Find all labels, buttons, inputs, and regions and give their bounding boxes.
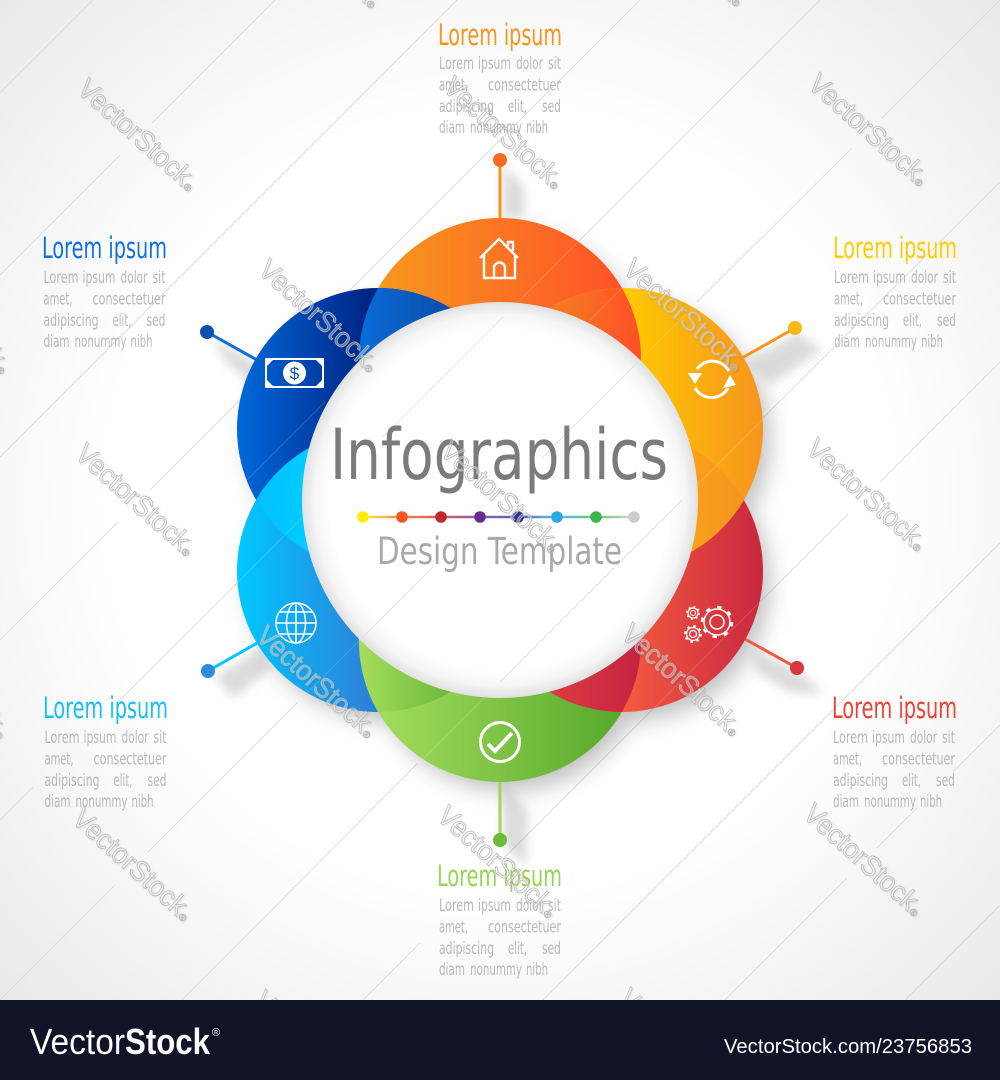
- text block: bottom: diam: [439, 960, 465, 979]
- line: green: [498, 780, 502, 840]
- line: top: [498, 160, 502, 220]
- text block: upper left: [42, 231, 167, 351]
- text block: upper left: elit,: [112, 311, 132, 330]
- text block: upper left: Lorem: [44, 268, 78, 287]
- text block: upper right: diam: [834, 332, 860, 351]
- text block: lower right: nibh: [920, 792, 942, 811]
- text block: top: sit: [548, 54, 561, 73]
- text block: lower left: ipsum: [84, 728, 116, 747]
- text block: bottom: ipsum: [478, 896, 511, 915]
- text block: bottom: Lorem ipsum: [437, 859, 562, 893]
- text block: lower left: sed: [148, 771, 166, 790]
- text block: upper right: nonummy: [865, 332, 917, 351]
- text block: upper right: elit,: [903, 311, 922, 330]
- text block: upper right: ipsum: [873, 268, 906, 287]
- dot: red: [790, 661, 804, 675]
- text block: bottom: [437, 859, 562, 979]
- overlap: orange over yellow: [550, 288, 641, 361]
- watermarks: VectorStock: [432, 800, 559, 919]
- watermarks: VectorStock: [801, 433, 928, 552]
- text block: lower left: consectetuer: [94, 750, 167, 768]
- watermarks: VectorStock: [803, 68, 930, 187]
- text block: upper right: amet,: [834, 290, 863, 308]
- text block: lower right: adipiscing: [833, 771, 888, 790]
- text block: top: [438, 18, 562, 137]
- text block: top: sed: [542, 97, 561, 116]
- text block: upper left: dolor: [120, 268, 148, 287]
- text block: bottom: amet,: [439, 918, 468, 936]
- text block: bottom: dolor: [516, 896, 543, 915]
- text block: lower right: sed: [936, 771, 955, 790]
- text block: bottom: Lorem: [439, 896, 474, 915]
- text block: upper left: consectetuer: [92, 290, 166, 308]
- text block: top: Lorem: [439, 54, 474, 73]
- watermarks: ®: [176, 912, 189, 925]
- text block: upper right: adipiscing: [834, 311, 889, 330]
- text block: lower right: Lorem: [833, 728, 868, 747]
- text block: top: elit,: [508, 97, 527, 116]
- text block: lower right: elit,: [902, 771, 921, 790]
- petal ring: [237, 218, 763, 782]
- connector shadows: [212, 165, 824, 866]
- watermarks: ®: [541, 909, 554, 922]
- text block: upper left: nibh: [130, 332, 152, 351]
- colored dot divider: [357, 511, 640, 523]
- watermarks: VectorStock: [618, 253, 745, 372]
- text block: top: amet,: [439, 76, 468, 94]
- icon: gears: [685, 607, 732, 642]
- icon: globe: [276, 603, 316, 643]
- text block: lower right: amet,: [833, 750, 862, 768]
- watermarks: Vec: [249, 985, 299, 1034]
- text block: lower right: ipsum: [872, 728, 905, 747]
- text block: lower left: elit,: [114, 771, 132, 790]
- watermarks: VectorStock: [435, 435, 562, 554]
- text block: bottom: elit,: [508, 939, 527, 958]
- watermarks: ®: [912, 177, 925, 190]
- text block: upper right: [833, 231, 957, 351]
- text block: top: Lorem ipsum: [438, 18, 562, 52]
- text block: lower left: diam: [44, 792, 70, 811]
- watermarks: VectorStock: [798, 798, 925, 917]
- watermarks: ®: [910, 542, 923, 555]
- dot: yellow: [788, 321, 802, 335]
- dot: cyan: [201, 664, 215, 678]
- text block: lower right: sit: [942, 728, 955, 747]
- text block: upper left: sed: [146, 311, 166, 330]
- watermarks: VectorStock: [438, 71, 565, 190]
- line: yellow: [742, 328, 795, 358]
- petal: yellow: [481, 288, 763, 570]
- text block: top: diam: [439, 118, 465, 137]
- icon: banknote: $: [290, 364, 300, 383]
- text block: upper right: consectetuer: [883, 290, 956, 308]
- text block: upper left: Lorem ipsum: [42, 231, 167, 265]
- text block: upper left: amet,: [44, 290, 73, 308]
- text block: lower left: nonummy: [76, 792, 128, 811]
- text block: upper right: nibh: [921, 332, 943, 351]
- watermarks: VectorStock: [72, 73, 199, 192]
- watermarks: VectorStock: [616, 618, 743, 737]
- central white disc: [302, 302, 698, 698]
- overlap: light blue over blue: [256, 448, 309, 552]
- text block: upper left: nonummy: [74, 332, 127, 351]
- text block: top: adipiscing: [439, 97, 494, 116]
- text block: lower left: adipiscing: [44, 771, 100, 790]
- text block: lower left: amet,: [44, 750, 74, 768]
- text block: top: nonummy: [470, 118, 522, 137]
- footer bar: [0, 1000, 1000, 1080]
- watermarks: ®: [181, 182, 194, 195]
- text block: bottom: sit: [548, 896, 561, 915]
- text block: upper left: ipsum: [82, 268, 116, 287]
- watermarks: ®: [727, 362, 740, 375]
- watermarks: ®: [725, 727, 738, 740]
- icon: refresh arrows: [688, 361, 736, 398]
- text block: bottom: consectetuer: [488, 918, 561, 936]
- text block: lower left: sit: [154, 728, 167, 747]
- text block: upper left: adipiscing: [44, 311, 98, 330]
- watermarks: VectorStock: [70, 438, 197, 557]
- overlap: blue over orange: [359, 288, 451, 361]
- text block: upper right: sed: [937, 311, 956, 330]
- text block: top: nibh: [526, 118, 548, 137]
- watermarks: Vec: [614, 983, 664, 1032]
- text block: lower right: nonummy: [864, 792, 916, 811]
- overlap: yellow over red: [691, 448, 744, 552]
- title: Infographics: Infographics: [330, 414, 668, 496]
- text block: lower left: [43, 691, 168, 811]
- dot: blue: [200, 325, 214, 339]
- text block: bottom: adipiscing: [439, 939, 494, 958]
- petal: green: [359, 500, 641, 782]
- text block: upper right: Lorem: [834, 268, 869, 287]
- petal: light blue: [237, 430, 519, 712]
- connector dots: [200, 153, 804, 847]
- text block: upper left: diam: [44, 332, 70, 351]
- text block: upper right: dolor: [911, 268, 938, 287]
- dot: green: [493, 833, 507, 847]
- footer image id: VectorStock.com/23756853: [724, 1035, 972, 1058]
- text block: upper left: sit: [152, 268, 166, 287]
- watermarks: ®: [360, 729, 373, 742]
- text block: lower left: nibh: [132, 792, 154, 811]
- petal: orange: [359, 218, 641, 500]
- subtitle: Design Template: Design Template: [377, 530, 622, 573]
- watermarks: ®: [362, 363, 375, 376]
- text block: lower right: diam: [833, 792, 859, 811]
- text block: lower right: consectetuer: [882, 750, 955, 768]
- text block: lower left: dolor: [122, 728, 149, 747]
- text block: lower left: Lorem ipsum: [43, 691, 168, 725]
- text block: lower right: [832, 691, 957, 811]
- line: blue: [207, 332, 257, 360]
- dot: top: [493, 153, 507, 167]
- watermarks: VectorStock: [253, 254, 380, 373]
- petal: blue: [237, 288, 519, 570]
- text block: lower right: dolor: [910, 728, 937, 747]
- watermarks: ®: [179, 547, 192, 560]
- text block: bottom: nibh: [526, 960, 548, 979]
- icon: banknote: [266, 359, 323, 387]
- line: cyan: [208, 642, 259, 671]
- connector lines: [207, 160, 797, 840]
- watermarks: ®: [907, 907, 920, 920]
- line: red: [745, 639, 797, 668]
- icon: check mark: [480, 722, 520, 762]
- text block: lower left: Lorem: [44, 728, 80, 747]
- watermarks: VectorStock: [67, 803, 194, 922]
- overlap: green over light blue: [359, 642, 450, 712]
- petal: red: [481, 430, 763, 712]
- watermarks: ®: [544, 544, 557, 557]
- text block: bottom: nonummy: [470, 960, 522, 979]
- watermarks: ®: [547, 180, 560, 193]
- watermarks: VectorStock: [251, 620, 378, 739]
- footer registered mark: ®: [212, 1027, 220, 1039]
- petal drop shadow: [248, 231, 770, 791]
- text block: top: consectetuer: [488, 76, 561, 94]
- text block: bottom: sed: [542, 939, 561, 958]
- footer logo: VectorStock: [30, 1021, 211, 1062]
- overlap: red over green: [549, 639, 641, 712]
- text block: upper right: sit: [943, 268, 956, 287]
- text block: top: dolor: [516, 54, 543, 73]
- icon: house: [480, 239, 518, 278]
- text block: top: ipsum: [478, 54, 511, 73]
